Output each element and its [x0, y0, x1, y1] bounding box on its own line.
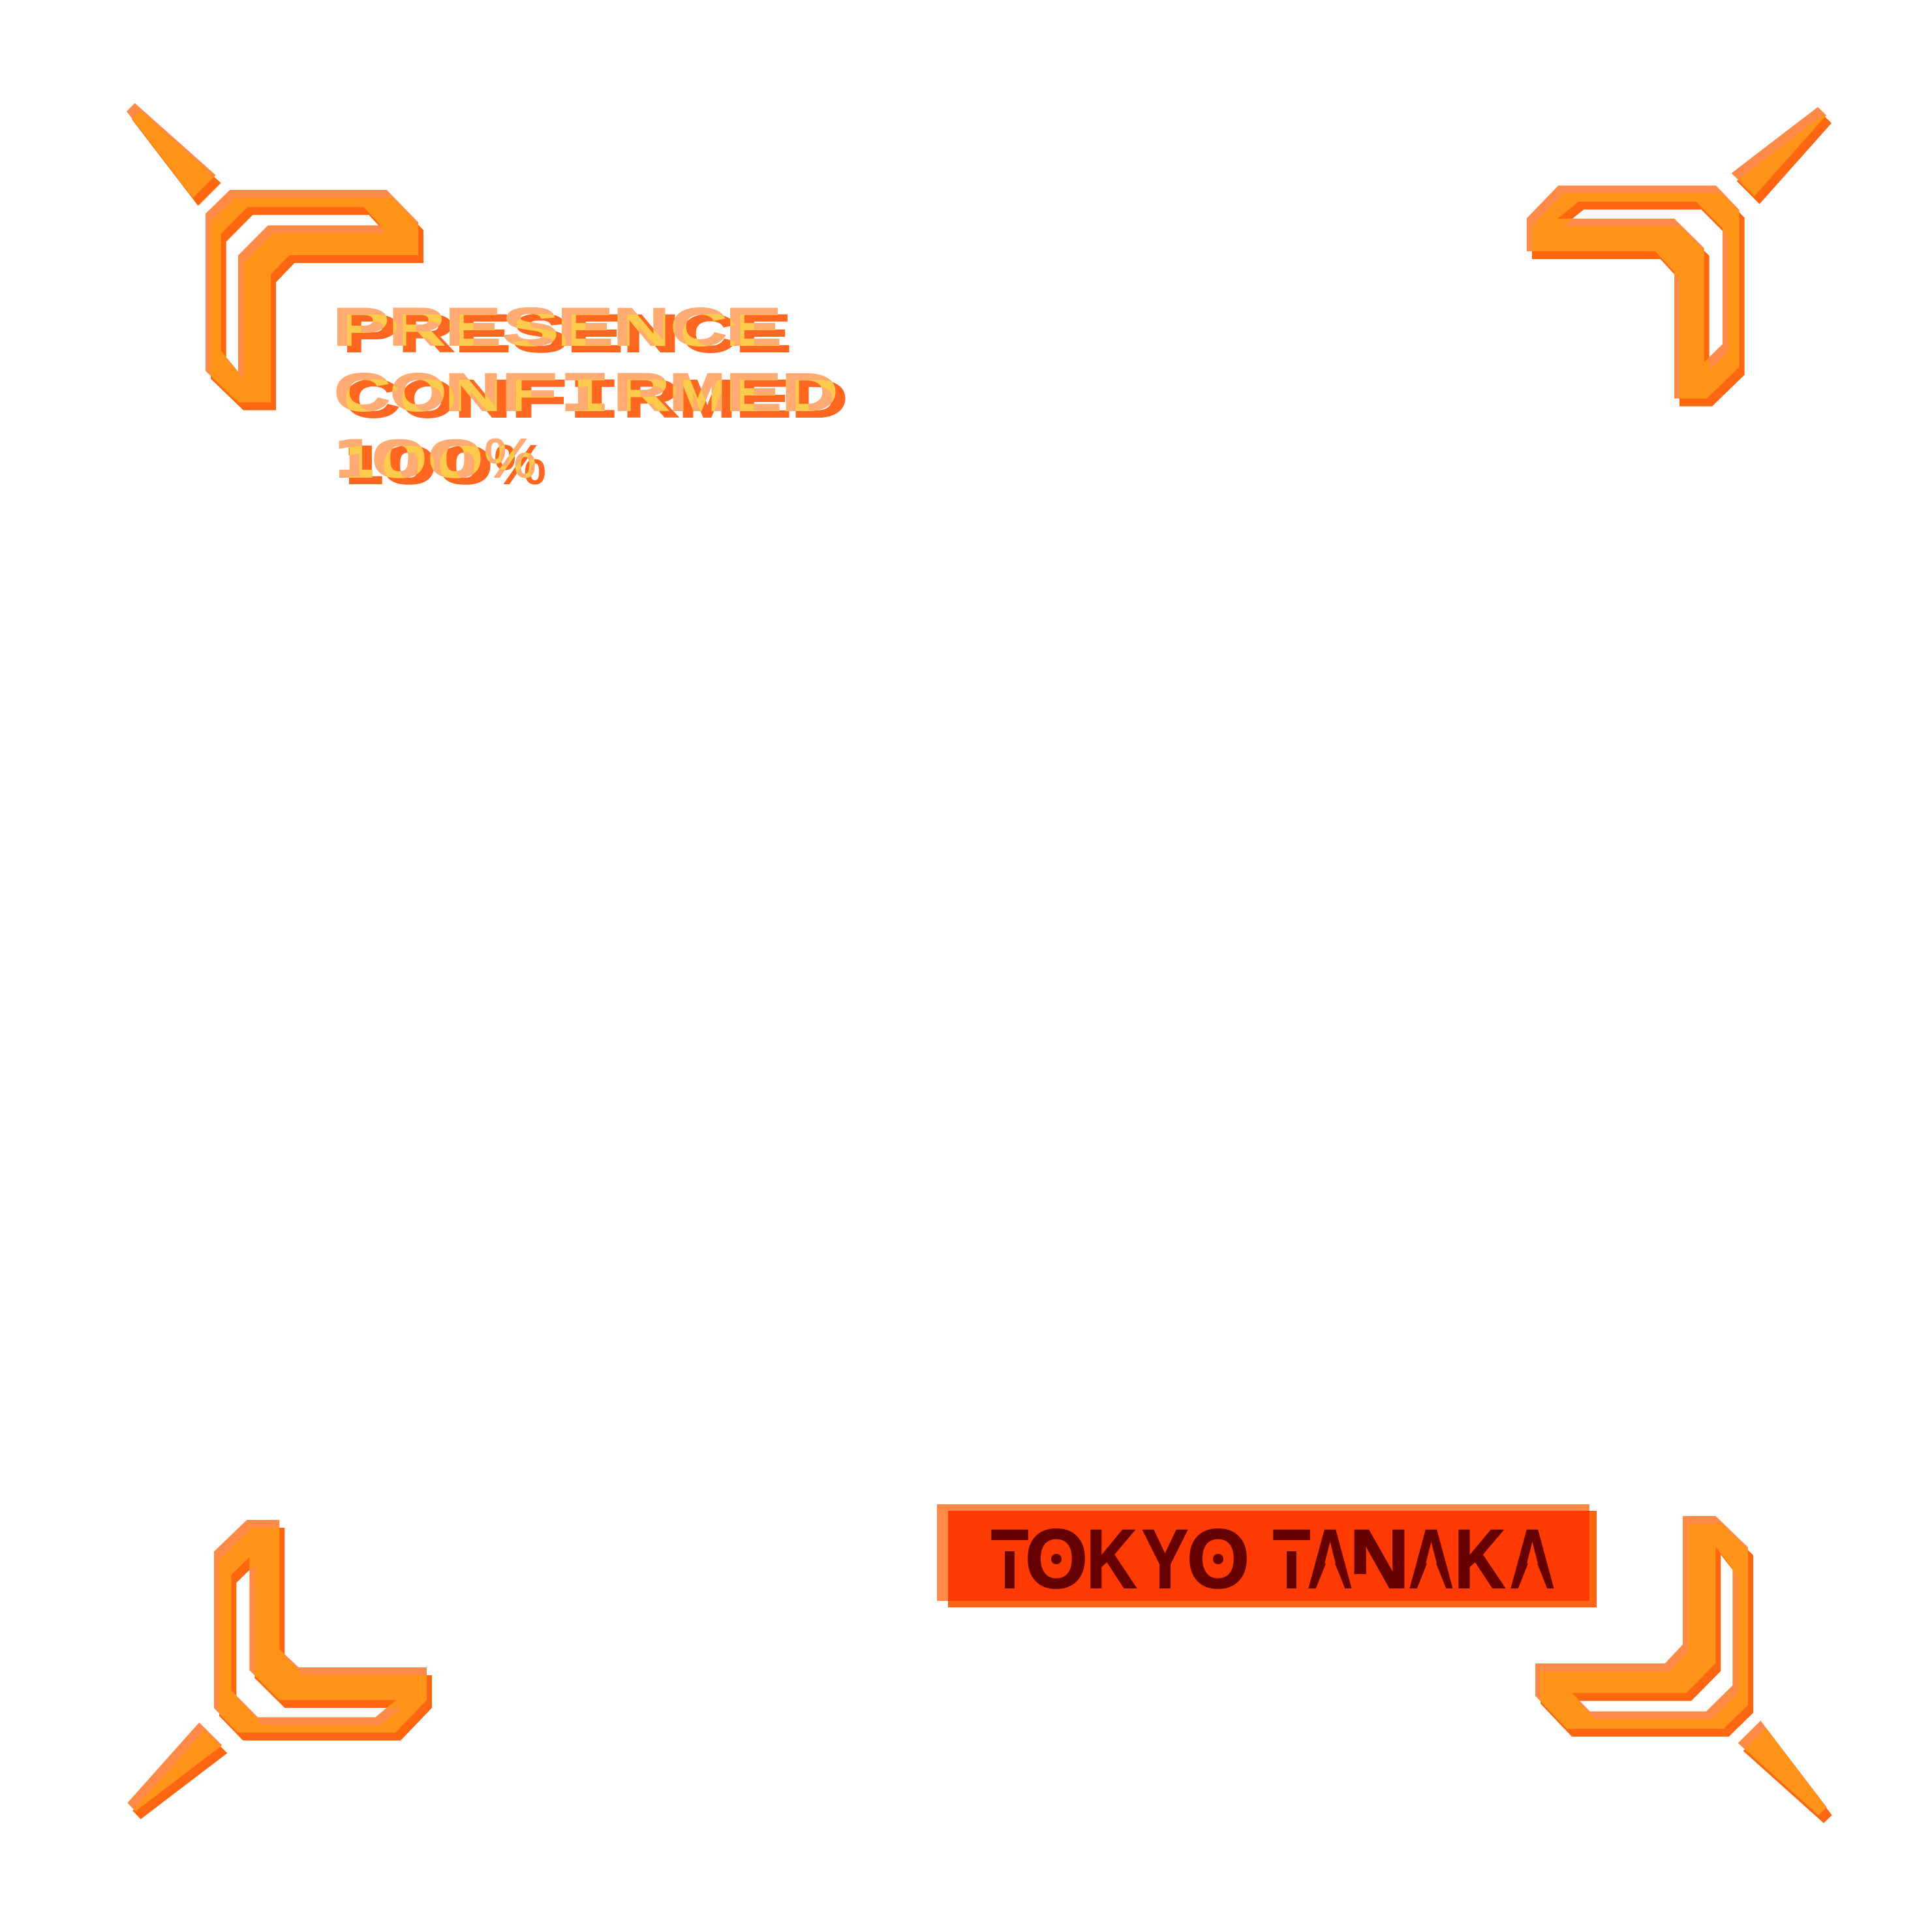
heading: presence confirmed 100%: % — [484, 427, 536, 489]
bracket shape — [1535, 1516, 1753, 1737]
heading: presence confirmed 100%: S — [502, 298, 559, 357]
heading: presence confirmed 100%: D — [782, 363, 838, 422]
heading: presence confirmed 100%: C — [334, 363, 390, 422]
spike — [127, 103, 221, 206]
dots inside the letters O — [1051, 1554, 1223, 1564]
heading: presence confirmed 100%: 0 — [427, 429, 483, 489]
banner text: tokyo tanaka: K — [1086, 1513, 1137, 1606]
heading: presence confirmed 100%: O — [390, 363, 446, 422]
heading: presence confirmed 100%: E — [726, 298, 782, 357]
banner text: tokyo tanaka: Y — [1142, 1513, 1188, 1606]
banner text: tokyo tanaka: A — [1510, 1513, 1555, 1606]
bracket shape — [1527, 185, 1745, 407]
spike — [1738, 1721, 1832, 1823]
heading: presence confirmed 100%: R — [389, 298, 445, 357]
bracket shape — [214, 1520, 432, 1740]
heading: presence confirmed 100%: N — [445, 363, 501, 422]
banner text: tokyo tanaka: A — [1409, 1513, 1454, 1606]
heading: presence confirmed 100%: 1 — [333, 431, 376, 489]
name banner — [937, 1504, 1597, 1607]
heading: presence confirmed 100%: E — [557, 298, 613, 357]
infographic canvas — [127, 103, 1832, 1823]
banner text: tokyo tanaka: N — [1349, 1513, 1409, 1606]
heading: presence confirmed 100%: E — [445, 298, 501, 357]
bracket shape — [206, 190, 423, 410]
heading: presence confirmed 100%: E — [726, 363, 782, 422]
banner text: tokyo tanaka: T — [1273, 1513, 1310, 1606]
heading: presence confirmed 100%: N — [613, 298, 669, 357]
corner bracket: bottom left — [127, 1520, 432, 1819]
corner bracket: top left — [127, 103, 423, 410]
heading: presence confirmed 100%: C — [671, 298, 727, 357]
spike — [127, 1722, 227, 1819]
heading: presence confirmed 100%: F — [501, 363, 557, 422]
heading: presence confirmed 100%: P — [333, 298, 389, 357]
spike — [1732, 107, 1832, 204]
heading: presence confirmed 100%: M — [669, 363, 726, 422]
corner bracket: bottom right — [1535, 1516, 1832, 1823]
heading: presence confirmed 100%: R — [613, 363, 669, 422]
banner text: tokyo tanaka: T — [991, 1513, 1028, 1606]
banner text: tokyo tanaka: O — [1025, 1513, 1088, 1606]
corner bracket: top right — [1527, 107, 1832, 407]
banner text: tokyo tanaka: K — [1454, 1513, 1505, 1606]
heading: presence confirmed 100% — [336, 307, 846, 485]
banner text: tokyo tanaka: O — [1187, 1513, 1250, 1606]
heading: presence confirmed 100%: I — [560, 363, 610, 427]
banner text: tokyo tanaka: A — [1308, 1513, 1353, 1606]
heading: presence confirmed 100%: 0 — [371, 429, 427, 489]
